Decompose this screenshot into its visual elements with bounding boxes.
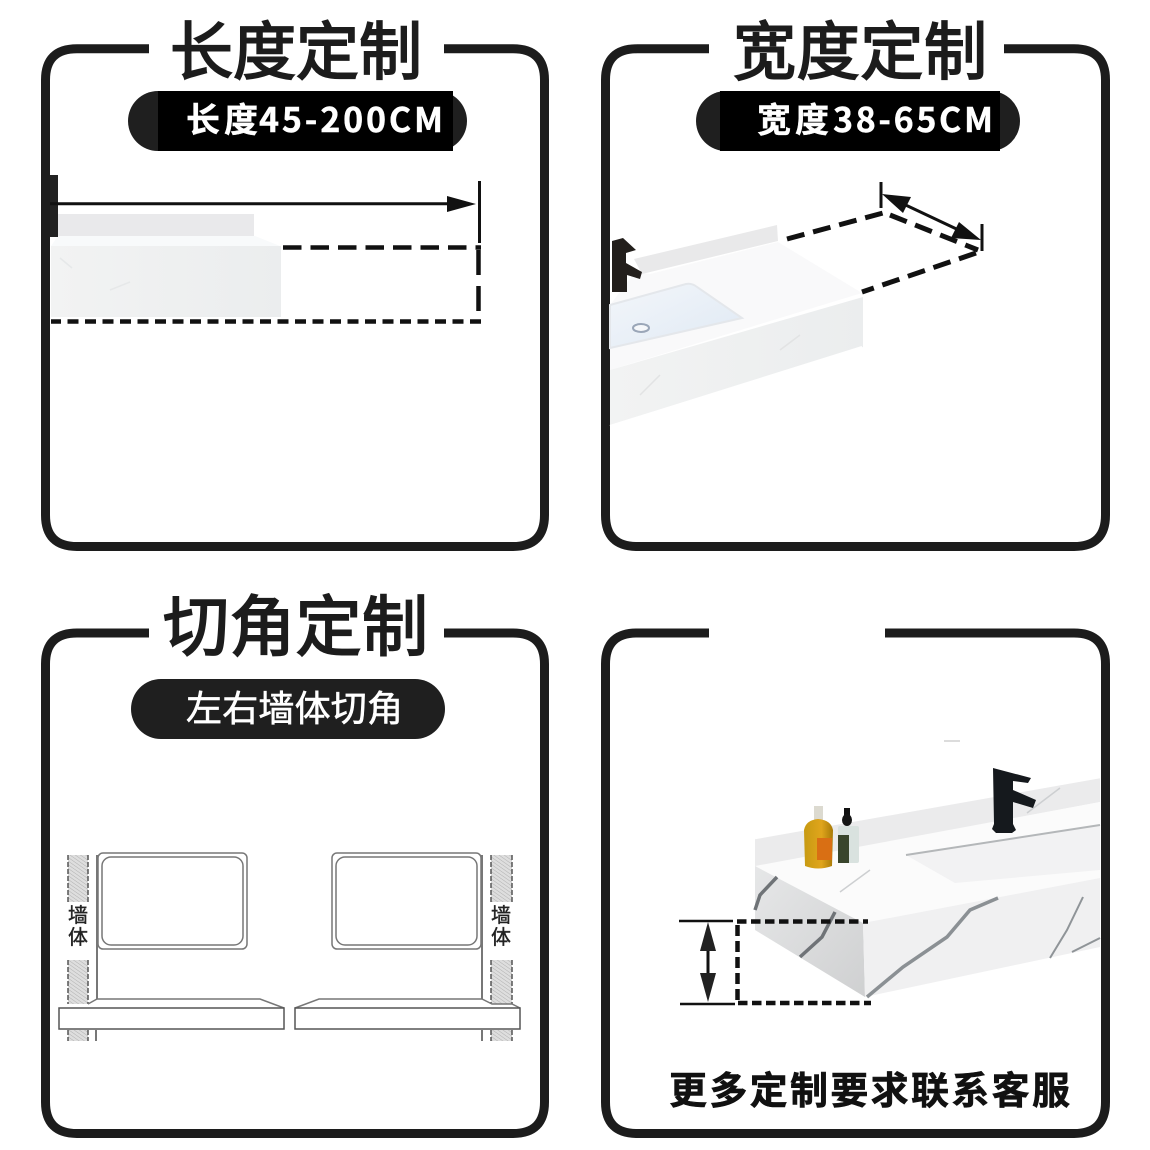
height arrow [679, 921, 735, 1004]
pill label: 长度 [186, 93, 258, 142]
width arrow [881, 182, 982, 251]
wall hatch with label: 墙 [491, 904, 511, 927]
panel frame [606, 49, 1106, 547]
note text: 更多定制要求联系客服 [669, 1071, 1070, 1113]
countertop stone [51, 214, 281, 317]
pill label: 左右墙体切角 [186, 688, 403, 729]
panel: width customization [606, 18, 1106, 546]
heading: 宽度定制 [733, 18, 987, 88]
diagram: left wall corner cut [59, 853, 284, 1041]
wall hatch with label [491, 855, 512, 1041]
panel: length customization [46, 18, 544, 546]
pill label: 38-65CM [833, 93, 993, 142]
dashed extension outline [51, 248, 481, 322]
wall hatch with label: 体 [68, 926, 88, 949]
heading: 切角定制 [163, 590, 428, 664]
wall hatch with label: 体 [491, 926, 511, 949]
pill label [696, 91, 1020, 151]
faucet edge [50, 175, 58, 237]
soap bottle clear [838, 808, 859, 863]
panel frame [46, 49, 544, 547]
faucet [992, 768, 1036, 833]
pill label: 宽度 [757, 93, 829, 142]
panel frame [46, 633, 544, 1134]
pill label [131, 679, 445, 739]
countertop with basin [610, 225, 863, 426]
dashed extension outline [787, 213, 978, 292]
faucet [612, 238, 642, 292]
dashed height outline [737, 922, 871, 1004]
panel: corner cut customization [46, 590, 544, 1134]
length arrow [50, 181, 480, 243]
wall hatch with label [68, 855, 88, 1041]
heading: 长度定制 [170, 18, 422, 88]
wall hatch with label: 墙 [68, 904, 88, 927]
soap bottle amber [804, 806, 833, 868]
panel frame [606, 633, 1106, 1134]
pill label: 45-200CM [259, 93, 443, 142]
panel: height customization [606, 633, 1106, 1134]
pill label [128, 91, 467, 151]
marble countertop [755, 741, 1100, 997]
diagram: right wall corner cut [295, 853, 520, 1041]
